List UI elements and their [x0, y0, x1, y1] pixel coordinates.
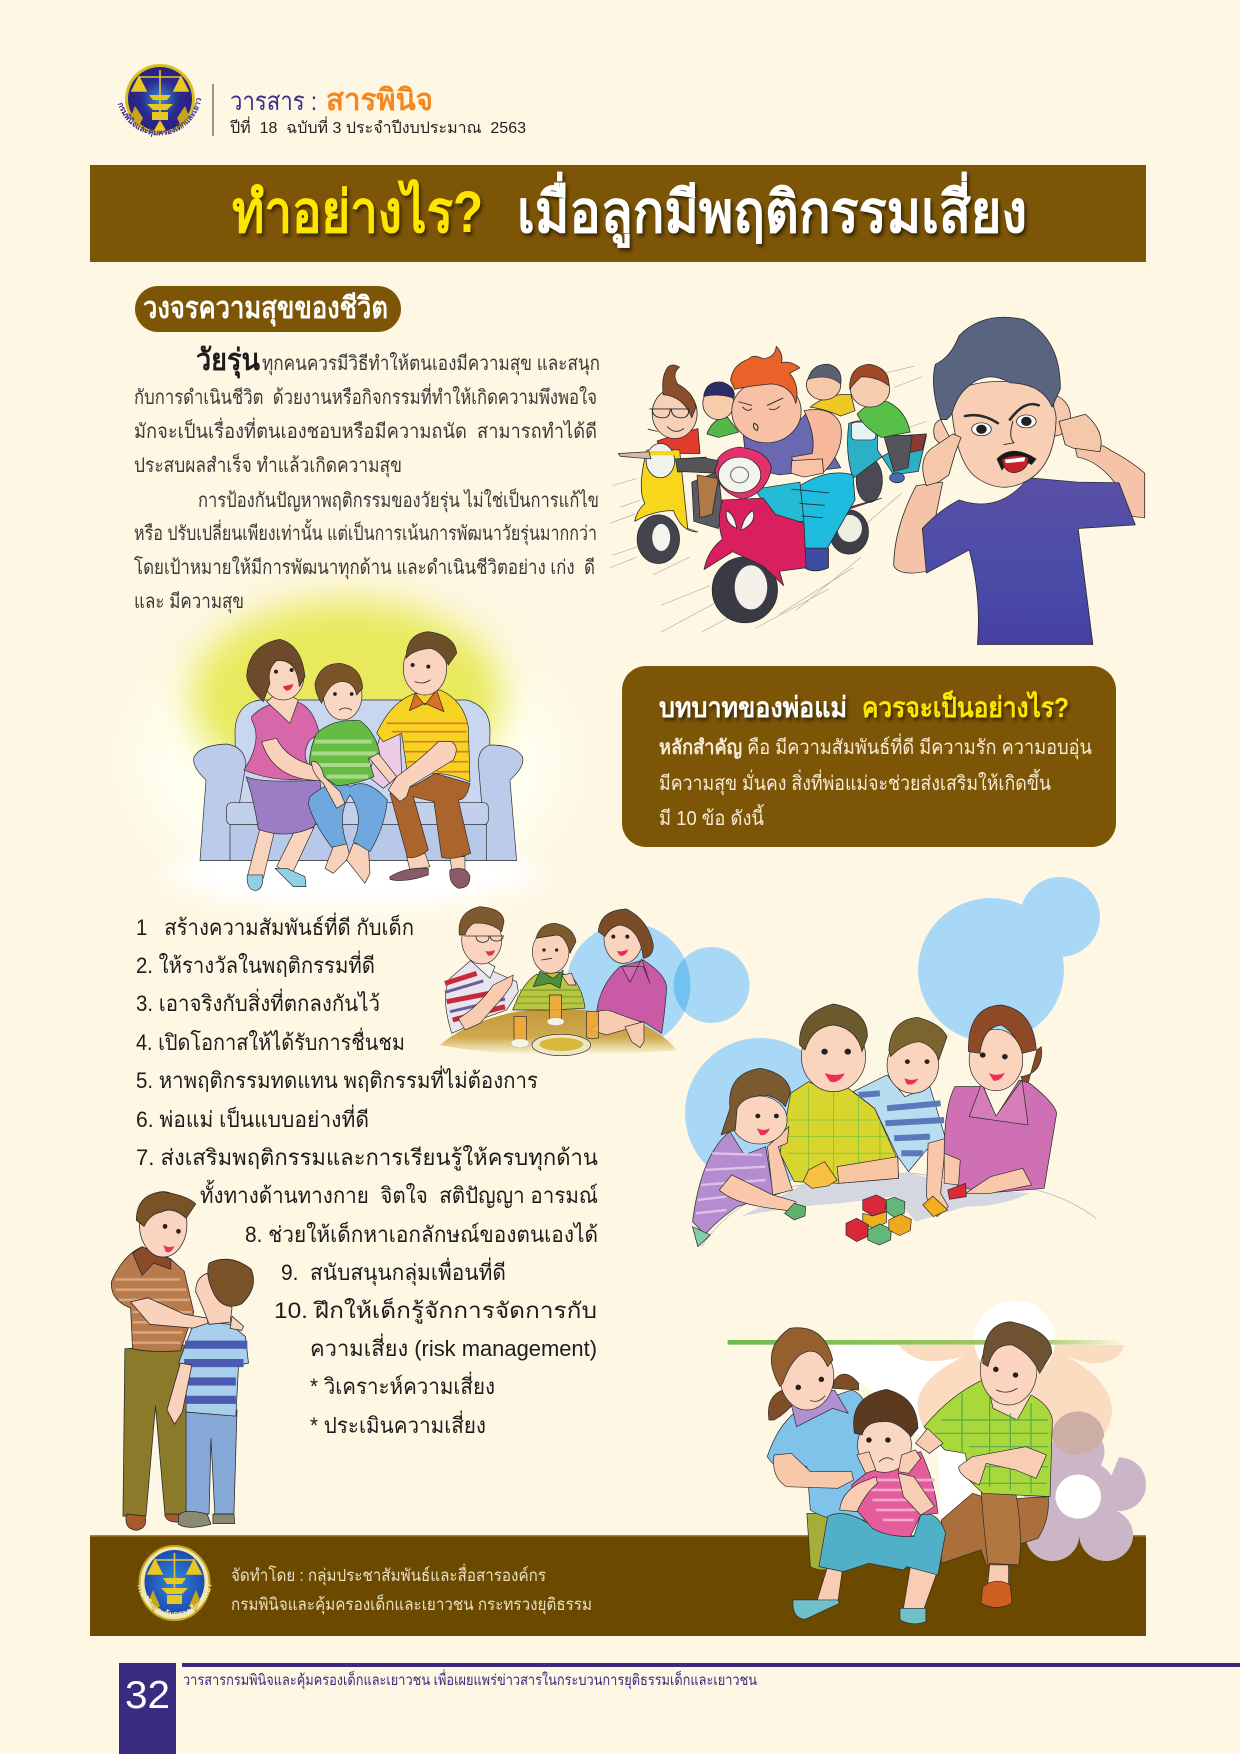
callout panel: parent roles [622, 666, 1116, 847]
illustration: family playing with blocks [692, 1004, 1096, 1247]
header: journal logo [118, 64, 202, 138]
title banner: เมื่อลูกมีพฤติกรรมเสี่ยง [517, 171, 1027, 248]
illustration: father talking to son, standing [111, 1192, 254, 1530]
page number tab [119, 1663, 176, 1754]
rear wheel of red scooter [829, 498, 882, 554]
decorative blue circles behind table family [566, 923, 750, 1047]
journal name: สารพินิจ [326, 84, 433, 117]
numbered list of ten points: 9. สนับสนุนกลุ่มเพื่อนที่ดี [281, 1257, 506, 1286]
footer logo [137, 1545, 212, 1621]
back right scooter and rider [848, 364, 926, 502]
numbered list of ten points: 10. ฝึกให้เด็กรู้จักการจัดการกับ [274, 1296, 597, 1324]
body text: มักจะเป็นเรื่องที่ตนเองชอบหรือมีความถนัด สามารถทำได้ดี [134, 417, 597, 443]
numbered list of ten points: ทั้งทางด้านทางกาย จิตใจ สติปัญญา อารมณ์ [200, 1180, 598, 1208]
mother [244, 639, 335, 891]
glasses and snacks on the table [511, 995, 599, 1056]
body text: และ มีความสุข [134, 591, 244, 614]
body text [134, 344, 600, 614]
footer organiser text: จัดทำโดย : กลุ่มประชาสัมพันธ์และสื่อสารองค์กร [231, 1563, 546, 1586]
callout panel: parent roles: มี 10 ข้อ ดังนี้ [659, 804, 764, 830]
father [111, 1192, 209, 1530]
table surface [701, 1173, 1096, 1247]
footer organiser text: กรมพินิจและคุ้มครองเด็กและเยาวชน กระทรวงยุติธรรม [231, 1593, 592, 1615]
decorative blue circles right [685, 877, 1100, 1188]
table [440, 1009, 677, 1055]
body text: วัยรุ่น [196, 344, 260, 379]
sofa [194, 700, 523, 861]
angry father [894, 317, 1145, 645]
title banner: ทำอย่างไร? [232, 179, 483, 245]
journal name: วารสาร : [230, 86, 317, 116]
title banner [90, 165, 1146, 262]
father [916, 1322, 1052, 1607]
boy in blue stripes [853, 1017, 948, 1217]
body text: การป้องกันปัญหาพฤติกรรมของวัยรุ่น ไม่ใช่เป็นการแก้ไข [198, 487, 599, 513]
green line [728, 1340, 1124, 1345]
speed lines [610, 366, 926, 632]
yellow scooter [618, 444, 722, 563]
main rider with orange hair [731, 346, 855, 571]
purple flower [1018, 1411, 1146, 1561]
body text: กับการดำเนินชีวิต ด้วยงานหรือกิจกรรมที่ทำให้เกิดความพึงพอใจ [134, 383, 597, 409]
son [308, 663, 397, 883]
father with glasses [445, 907, 518, 1033]
glow background [137, 600, 563, 907]
numbered list of ten points: 6. พ่อแม่ เป็นแบบอย่างที่ดี [136, 1104, 369, 1132]
section heading pill: วงจรความสุขของชีวิต [143, 292, 388, 327]
body text: ประสบผลสำเร็จ ทำแล้วเกิดความสุข [134, 452, 402, 478]
numbered list of ten points: 7. ส่งเสริมพฤติกรรมและการเรียนรู้ให้ครบทุกด้าน [136, 1145, 598, 1171]
peach flower [898, 1301, 1124, 1457]
callout panel: parent roles: บทบาทของพ่อแม่ [659, 692, 847, 723]
footer rule [182, 1663, 1240, 1667]
illustration: teen bikers and angry father [610, 317, 1145, 645]
footer journal tagline: วารสารกรมพินิจและคุ้มครองเด็กและเยาวชน เพื่อเผยแพร่ข่าวสารในกระบวนการยุติธรรมเด็กและเยาวชน [183, 1669, 757, 1690]
page number tab: 32 [125, 1674, 170, 1717]
illustration: family on a sofa with yellow glow [137, 600, 563, 907]
father [377, 632, 471, 888]
back rider in yellow [806, 364, 855, 416]
header divider [212, 84, 214, 136]
son [167, 1259, 254, 1527]
issue line: ปีที่ 18 ฉบับที่ 3 ประจำปีงบประมาณ 2563 [230, 116, 526, 137]
boy [793, 1389, 945, 1624]
girl in purple [692, 1068, 796, 1247]
callout panel: parent roles: หลักสำคัญ คือ มีความสัมพันธ์ที่ดี มีความรัก ความอบอุ่น [659, 733, 1092, 760]
illustration: worried boy with parents and flowers [728, 1301, 1146, 1624]
section heading pill [135, 286, 401, 332]
toy blocks [785, 1183, 966, 1245]
numbered list of ten points: 5. หาพฤติกรรมทดแทน พฤติกรรมที่ไม่ต้องการ [136, 1065, 538, 1093]
footer organiser text [231, 1563, 592, 1615]
illustration: family at the table [440, 907, 677, 1056]
numbered list of ten points: 3. เอาจริงกับสิ่งที่ตกลงกันไว้ [136, 988, 380, 1016]
numbered list of ten points: * วิเคราะห์ความเสี่ยง [310, 1371, 495, 1399]
mother in pink [944, 1005, 1057, 1193]
boy [513, 923, 585, 1010]
callout panel: parent roles: ควรจะเป็นอย่างไร? [862, 690, 1069, 723]
body text: หรือ ปรับเปลี่ยนเพียงเท่านั้น แต่เป็นการเน้นการพัฒนาวัยรุ่นมากกว่า [134, 519, 597, 546]
mother [767, 1328, 872, 1570]
white backdrop [833, 1345, 976, 1520]
numbered list of ten points [136, 912, 598, 1438]
numbered list of ten points: 1 สร้างความสัมพันธ์ที่ดี กับเด็ก [136, 912, 414, 940]
callout panel: parent roles: มีความสุข มั่นคง สิ่งที่พ่อแม่จะช่วยส่งเสริมให้เกิดขึ้น [659, 769, 1051, 796]
journal name [230, 84, 433, 117]
small rider in green [703, 382, 739, 437]
body text: โดยเป้าหมายให้มีการพัฒนาทุกด้าน และดำเนินชีวิตอย่าง เก่ง ดี [134, 556, 595, 580]
body text: ทุกคนควรมีวิธีทำให้ตนเองมีความสุข และสนุก [262, 352, 600, 376]
numbered list of ten points: ความเสี่ยง (risk management) [310, 1333, 597, 1361]
numbered list of ten points: * ประเมินความเสี่ยง [310, 1410, 486, 1438]
numbered list of ten points: 2. ให้รางวัลในพฤติกรรมที่ดี [136, 950, 375, 978]
left rider with glasses [648, 365, 700, 454]
mother [590, 909, 667, 1048]
footer logo: กรมพินิจและคุ้มครองเด็กและเยาวชน [137, 1584, 212, 1618]
numbered list of ten points: 8. ช่วยให้เด็กหาเอกลักษณ์ของตนเองได้ [245, 1220, 598, 1247]
father in green check shirt [780, 1004, 898, 1188]
footer banner [90, 1535, 1146, 1636]
red front scooter [675, 447, 806, 623]
numbered list of ten points: 4. เปิดโอกาสให้ได้รับการชื่นชม [136, 1027, 405, 1055]
